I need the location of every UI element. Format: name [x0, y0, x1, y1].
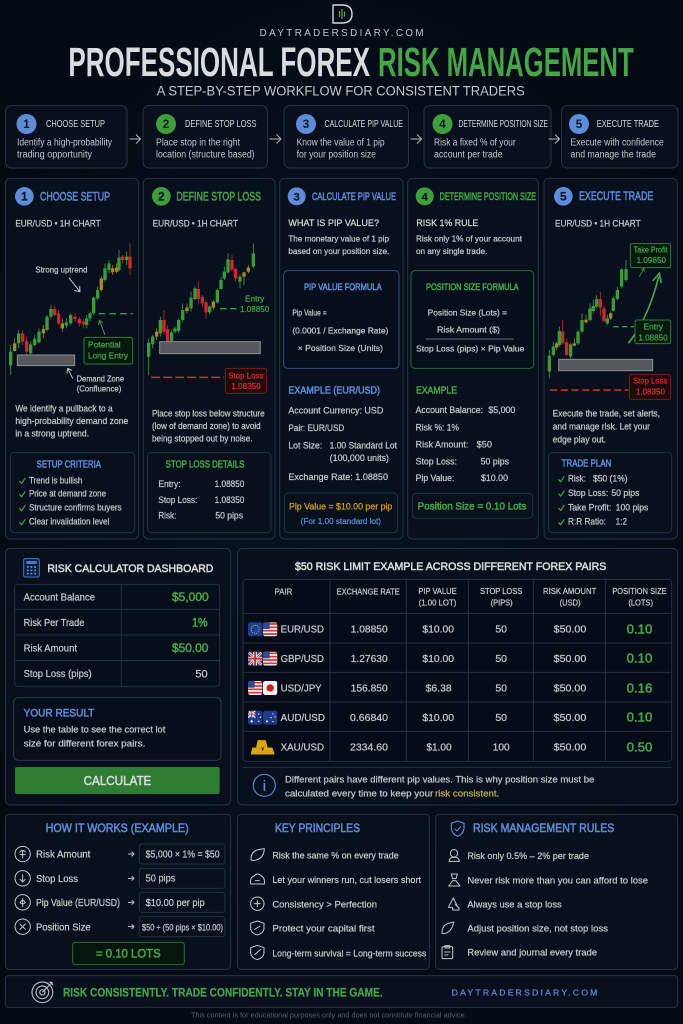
row: EUR/USD — [248, 621, 652, 636]
inputs table — [15, 584, 220, 686]
principle 3 — [251, 897, 377, 910]
table header: EXCHANGE RATE — [337, 587, 400, 597]
demand zone — [160, 342, 260, 354]
row: XAU/USD: 100 — [493, 743, 510, 754]
arrow — [67, 368, 73, 378]
note: Different pairs have different pip values. This is why position size must be — [285, 775, 594, 785]
icon: site logo — [333, 5, 352, 23]
heading: HOW IT WORKS (EXAMPLE) — [46, 822, 189, 835]
description: (low of demand zone) to avoid — [152, 421, 261, 431]
callout: potential long entry — [84, 337, 133, 364]
website: DAYTRADERSDIARY.COM — [452, 987, 597, 997]
table header: (LOTS) — [628, 597, 653, 607]
row: risk amount: $5,000 × 1% = $50 — [146, 849, 220, 860]
row: XAU/USD — [252, 739, 652, 754]
callout: entry: 1.08850 — [638, 333, 668, 343]
setup criteria box: Trend is bullish — [29, 475, 82, 485]
callout: stop loss: 1.08350 — [231, 381, 261, 391]
entry line — [99, 312, 133, 316]
note — [285, 775, 594, 799]
table header: PIP VALUE — [418, 586, 457, 596]
row: pip value — [15, 892, 225, 912]
formula box: POSITION SIZE FORMULA — [426, 282, 519, 292]
result box — [14, 698, 221, 760]
result: lots — [73, 942, 184, 965]
example: Exchange Rate: 1.08850 — [288, 472, 388, 482]
example: $5,000 — [488, 405, 515, 415]
subheading: WHAT IS PIP VALUE? — [288, 218, 379, 228]
heading: KEY PRINCIPLES — [275, 822, 360, 835]
site name: DAYTRADERSDIARY.COM — [260, 28, 424, 39]
table header: RISK AMOUNT — [543, 586, 596, 596]
callout: take profit: Take Profit — [634, 245, 668, 254]
calculate button: CALCULATE — [84, 774, 151, 788]
arrow — [548, 134, 560, 144]
row: GBP/USD: $10.00 — [422, 654, 454, 665]
inputs table: $5,000 — [172, 590, 209, 604]
step 5 card: 5 — [576, 117, 583, 131]
tagline: RISK CONSISTENTLY. TRADE CONFIDENTLY. STAY IN THE GAME. — [63, 985, 383, 999]
row: EUR/USD: 1.08850 — [351, 625, 388, 636]
formula box: Pip Value = — [292, 307, 327, 317]
row: XAU/USD: $1.00 — [426, 743, 452, 754]
arrow — [130, 134, 140, 144]
principle 2: Let your winners run, cut losers short — [272, 875, 421, 885]
example: Account Currency: USD — [288, 405, 384, 415]
step 4 card: DETERMINE POSITION SIZE — [459, 118, 548, 130]
row: USD/JPY: USD/JPY — [281, 684, 322, 695]
example: 50 pips — [481, 457, 509, 467]
row: USD/JPY — [248, 680, 652, 695]
step badge: 3 — [294, 192, 300, 204]
step 1 card: 1 — [23, 117, 30, 131]
description: Place stop loss below structure — [152, 408, 265, 418]
result box: (For 1.00 standard lot) — [301, 516, 381, 526]
chart label: EUR/USD • 1H CHART — [555, 218, 641, 228]
description — [416, 233, 523, 256]
header — [68, 5, 634, 98]
example — [288, 386, 397, 482]
stop loss details box: 1.08850 — [215, 479, 244, 489]
row: EUR/USD: EUR/USD — [281, 625, 324, 636]
inputs table: Account Balance — [24, 592, 95, 603]
result box: Use the table to see the correct lot — [24, 725, 166, 735]
heading: CHOOSE SETUP — [40, 189, 110, 203]
trade plan box: 50 pips — [611, 488, 640, 498]
label: demand zone — [77, 373, 124, 394]
formula box: × Position Size (Units) — [298, 343, 383, 353]
formula box: Position Size (Lots) = — [428, 308, 507, 318]
row: AUD/USD: AUD/USD — [281, 713, 325, 724]
heading: CALCULATE PIP VALUE — [312, 191, 396, 203]
step 1 card — [6, 106, 127, 168]
row: pip value: $10.00 per pip — [146, 898, 205, 909]
example: $10.00 — [481, 473, 508, 483]
demand zone — [559, 359, 653, 371]
setup criteria box — [10, 452, 135, 533]
callout: entry: Entry — [644, 321, 664, 331]
example: Pair: EUR/USD — [288, 423, 345, 433]
principle 4 — [251, 921, 375, 935]
entry line — [613, 325, 634, 329]
result box: YOUR RESULT — [24, 707, 94, 719]
callout: stop loss: 1.08350 — [636, 386, 665, 396]
step 2 card: 2 — [163, 117, 170, 131]
step 1 card: trading opportunity — [17, 150, 92, 160]
table header: POSITION SIZE — [612, 586, 667, 596]
panel: key principles — [237, 814, 429, 969]
trade plan box: Stop Loss: — [568, 488, 608, 498]
setup criteria box: Price at demand zone — [29, 489, 106, 499]
row: GBP/USD: 1.27630 — [351, 654, 388, 665]
row: GBP/USD: 0.10 — [627, 651, 652, 666]
step badge — [288, 187, 306, 205]
description — [288, 233, 389, 256]
step 5 card — [562, 106, 678, 168]
example — [416, 385, 515, 483]
panel: risk limit table — [238, 548, 678, 805]
step 2 card: location (structure based) — [156, 150, 255, 160]
panel: step 1 choose setup — [5, 178, 139, 539]
row: EUR/USD: 50 — [495, 625, 507, 636]
step 4 card: 4 — [439, 117, 446, 131]
panel: how it works — [5, 814, 231, 969]
principle 5 — [251, 945, 427, 960]
result: lots: = 0.10 LOTS — [96, 947, 161, 961]
note: calculated every time to keep your — [285, 789, 433, 799]
description: We identify a pullback to a — [15, 403, 113, 413]
rule 2: Never risk more than you can afford to lose — [467, 875, 648, 885]
row: XAU/USD: 0.50 — [627, 739, 652, 754]
example: Risk %: 1% — [416, 422, 459, 432]
trade plan box — [549, 452, 672, 533]
row: USD/JPY: $6.38 — [426, 684, 452, 695]
chart label: EUR/USD • 1H CHART — [153, 218, 238, 228]
calculate button — [15, 767, 220, 794]
demand zone — [17, 355, 75, 366]
description: in a strong uptrend. — [15, 429, 89, 439]
arrow — [69, 278, 80, 292]
example: EXAMPLE — [416, 385, 457, 396]
example: Risk Amount: — [416, 439, 468, 449]
row: pip value: Pip Value (EUR/USD) — [36, 898, 120, 909]
callout: stop loss — [629, 374, 671, 399]
row: stop loss — [15, 868, 225, 888]
panel: step 2 define stop loss — [143, 178, 275, 539]
stop loss details box: 1.08350 — [215, 495, 244, 505]
principle 4: Protect your capital first — [272, 924, 375, 934]
callout: potential long entry: Potential — [88, 340, 121, 350]
workflow steps — [6, 106, 678, 168]
row: AUD/USD: 0.66840 — [350, 713, 388, 724]
step badge: 2 — [158, 190, 165, 204]
step 3 card: Know the value of 1 pip — [297, 138, 385, 149]
table grid — [243, 579, 672, 761]
callout: take profit: 1.09850 — [637, 255, 666, 265]
callout: entry — [635, 320, 671, 344]
label: strong uptrend: Strong uptrend — [35, 265, 88, 275]
panel: risk management rules — [436, 814, 678, 969]
example: 1.00 Standard Lot — [330, 440, 397, 450]
description: and manage risk. Let your — [553, 421, 650, 431]
formula box — [284, 271, 399, 368]
callout: potential long entry: Long Entry — [88, 351, 129, 361]
step 5 card: EXECUTE TRADE — [597, 118, 659, 130]
result box: Pip Value = $10.00 per pip — [289, 501, 392, 511]
inputs table: Stop Loss (pips) — [24, 669, 92, 680]
step badge — [152, 187, 171, 206]
trade plan box: 100 pips — [616, 502, 649, 512]
trade plan box: Take Profit: — [568, 502, 611, 512]
row: XAU/USD: $50.00 — [554, 743, 587, 754]
label: demand zone: Demand Zone — [77, 373, 124, 383]
principle 5: Long-term survival = Long-term success — [272, 948, 427, 958]
icon: info — [253, 774, 275, 796]
example: Account Balance: — [416, 405, 483, 415]
inputs table: 1% — [192, 615, 208, 629]
label: entry: Entry — [245, 294, 265, 304]
panel: step 4 determine position size — [408, 178, 538, 539]
step badge — [15, 187, 34, 206]
stop loss details box — [148, 452, 271, 533]
principle 3: Consistency > Perfection — [272, 899, 377, 909]
disclaimer: This content is for educational purposes only and does not constitute financial advice. — [191, 1012, 467, 1019]
arrow — [639, 268, 644, 277]
step 1 card: CHOOSE SETUP — [46, 118, 105, 130]
example: Lot Size: — [288, 440, 322, 450]
candlestick chart — [549, 260, 626, 378]
trade plan box: TRADE PLAN — [562, 459, 611, 470]
formula box: PIP VALUE FORMULA — [304, 282, 382, 292]
rule 3 — [448, 898, 562, 910]
heading: DETERMINE POSITION SIZE — [440, 191, 536, 203]
description — [152, 408, 265, 444]
formula box — [411, 271, 534, 368]
step 5 card: Execute with confidence — [570, 138, 664, 149]
panel: step 5 execute trade — [544, 178, 677, 539]
table header: PAIR — [275, 586, 292, 596]
heading: EXECUTE TRADE — [579, 189, 653, 203]
trade plan box: Risk: — [568, 474, 586, 484]
note: . — [497, 789, 499, 799]
row: USD/JPY: 50 — [495, 684, 507, 695]
label: demand zone: (Confluence) — [77, 384, 122, 394]
step 3 card — [284, 106, 408, 168]
step 2 card — [143, 106, 268, 168]
panel: step 3 calculate pip value — [280, 178, 403, 539]
step 4 card: account per trade — [434, 150, 503, 160]
icon: shield — [451, 821, 464, 836]
row: AUD/USD: $10.00 — [422, 713, 454, 724]
description: based on your position size. — [288, 246, 389, 256]
example: Pip Value: — [416, 473, 454, 483]
candlestick chart — [11, 243, 130, 375]
description: on any single trade. — [416, 246, 487, 256]
entry line — [220, 307, 237, 311]
formula box: Risk Amount ($) — [437, 324, 500, 334]
footer banner — [5, 976, 678, 1007]
arrow — [410, 134, 422, 144]
result box — [412, 493, 533, 518]
rule 5: Review and journal every trade — [467, 948, 597, 958]
step 1 card: Identify a high-probability — [17, 138, 112, 149]
row: AUD/USD: $50.00 — [554, 713, 587, 724]
example: (100,000 units) — [330, 453, 389, 463]
row: EUR/USD: $50.00 — [554, 625, 587, 636]
stop loss details box: STOP LOSS DETAILS — [166, 459, 245, 470]
icon: info: i — [263, 779, 266, 795]
description: Execute the trade, set alerts, — [553, 409, 660, 419]
description: edge play out. — [553, 435, 606, 445]
note: risk consistent — [435, 789, 497, 799]
formula box: Stop Loss (pips) × Pip Value — [416, 343, 525, 353]
row: USD/JPY: 0.16 — [627, 680, 652, 695]
table header: STOP LOSS — [480, 586, 523, 596]
row: EUR/USD: 0.10 — [627, 621, 652, 636]
row: position size: $50 ÷ (50 pips × $10.00) — [142, 922, 223, 932]
candlestick chart — [149, 243, 253, 375]
description: high-probability demand zone — [15, 416, 128, 426]
rule 3: Always use a stop loss — [467, 900, 562, 910]
step 4 card — [424, 106, 551, 168]
heading: RISK MANAGEMENT RULES — [473, 822, 615, 835]
inputs table: Risk Per Trade — [24, 618, 84, 629]
heading: $50 RISK LIMIT EXAMPLE ACROSS DIFFERENT FOREX PAIRS — [295, 561, 606, 573]
row: stop loss: Stop Loss — [36, 874, 78, 885]
result box: Position Size = 0.10 Lots — [418, 502, 526, 513]
description — [15, 403, 128, 439]
stop loss details box: Entry: — [158, 479, 181, 489]
panel: risk calculator dashboard — [5, 548, 231, 805]
step 2 card: DEFINE STOP LOSS — [185, 118, 256, 130]
row: EUR/USD: $10.00 — [422, 625, 454, 636]
arrow — [99, 320, 105, 335]
chart label: EUR/USD • 1H CHART — [15, 218, 101, 228]
icon: calculator — [24, 559, 39, 577]
description: being stopped out by noise. — [152, 434, 253, 444]
subtitle: A STEP-BY-STEP WORKFLOW FOR CONSISTENT TRADERS — [157, 83, 525, 98]
setup criteria box: Clear invalidation level — [29, 517, 109, 527]
trade plan box: R:R Ratio: — [568, 517, 606, 527]
rule 5 — [442, 946, 597, 959]
heading: DEFINE STOP LOSS — [176, 189, 261, 203]
stop line — [550, 388, 628, 392]
step 4 card: Risk a fixed % of your — [434, 138, 516, 149]
rule 4: Adjust position size, not stop loss — [467, 924, 608, 934]
step 5 card: and manage the trade — [570, 150, 656, 160]
inputs table: 50 — [195, 668, 208, 680]
row: XAU/USD: 2334.60 — [350, 743, 388, 754]
setup criteria box: Structure confirms buyers — [29, 503, 122, 513]
step badge: 5 — [560, 190, 567, 204]
row: GBP/USD — [248, 651, 652, 666]
icon: target — [32, 982, 53, 1003]
arrow — [270, 134, 281, 144]
step 3 card: 3 — [303, 117, 310, 131]
description: Risk only 1% of your account — [416, 233, 523, 243]
trade plan box: $50 (1%) — [593, 474, 628, 484]
stop line — [151, 375, 224, 380]
step badge — [554, 187, 573, 206]
step 2 card: Place stop in the right — [156, 138, 240, 149]
step badge: 1 — [21, 190, 28, 204]
inputs table: Risk Amount — [24, 644, 77, 655]
example: Stop Loss: — [416, 457, 457, 467]
stop loss details box: Risk: — [158, 511, 176, 521]
description: The monetary value of 1 pip — [288, 233, 389, 243]
heading: RISK CALCULATOR DASHBOARD — [47, 563, 213, 575]
table header — [275, 586, 667, 607]
principle 1 — [251, 849, 399, 861]
row: risk amount — [15, 844, 225, 864]
setup criteria box: SETUP CRITERIA — [37, 459, 101, 470]
result box — [284, 493, 398, 533]
example: $50 — [477, 439, 492, 449]
formula box: (0.0001 / Exchange Rate) — [292, 325, 388, 335]
row: AUD/USD: 50 — [495, 713, 507, 724]
stop loss details box: Stop Loss: — [158, 495, 197, 505]
arrow: target path — [628, 273, 661, 343]
rule 1: Risk only 0.5% – 2% per trade — [467, 851, 589, 861]
step badge — [416, 187, 434, 205]
callout: take profit — [630, 244, 671, 268]
principle 1: Risk the same % on every trade — [272, 851, 399, 861]
table header: (PIPS) — [491, 597, 513, 607]
label: entry — [240, 294, 269, 314]
inputs table: $50.00 — [172, 641, 209, 655]
row: GBP/USD: $50.00 — [554, 654, 587, 665]
row: GBP/USD: GBP/USD — [281, 654, 324, 665]
description — [553, 409, 660, 445]
row: USD/JPY: $50.00 — [554, 684, 587, 695]
callout: stop loss: Stop Loss — [228, 370, 264, 380]
example: EXAMPLE (EUR/USD) — [288, 386, 380, 397]
table header: (USD) — [560, 597, 581, 607]
row: position size: Position Size — [36, 922, 91, 933]
row: USD/JPY: 156.850 — [351, 684, 388, 695]
step 3 card: for your position size — [297, 150, 376, 160]
trade plan box: 1:2 — [616, 517, 627, 527]
stop loss details box: 50 pips — [215, 511, 243, 521]
subheading: RISK 1% RULE — [416, 218, 478, 228]
callout: stop loss — [225, 368, 266, 393]
step 3 card: CALCULATE PIP VALUE — [324, 118, 403, 130]
row: risk amount: Risk Amount — [36, 850, 91, 861]
step badge: 4 — [422, 192, 429, 204]
title: PROFESSIONAL FOREX — [68, 39, 370, 85]
label: entry: 1.08850 — [240, 304, 269, 314]
result box: size for different forex pairs. — [24, 739, 145, 749]
row: XAU/USD: XAU/USD — [281, 743, 324, 754]
row: stop loss: 50 pips — [146, 874, 175, 885]
row: AUD/USD — [248, 710, 652, 725]
table header: (1.00 LOT) — [419, 597, 457, 607]
row: position size — [15, 917, 225, 937]
row: AUD/USD: 0.10 — [627, 710, 652, 725]
row: GBP/USD: 50 — [495, 654, 507, 665]
callout: stop loss: Stop Loss — [633, 376, 668, 386]
